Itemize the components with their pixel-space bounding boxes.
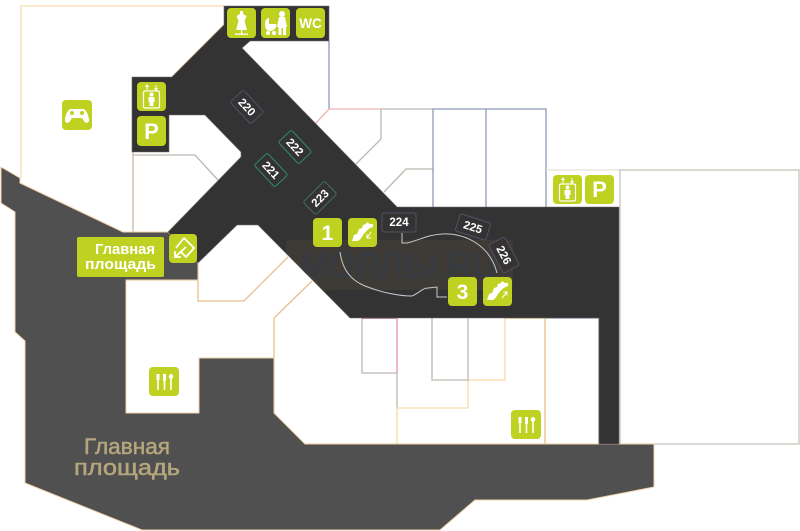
tag 221 — [254, 153, 288, 187]
icon: escalator down — [348, 218, 377, 247]
watermark: МОЛЛЫ.RU — [300, 245, 497, 287]
heading: main square: площадь — [74, 455, 180, 480]
icon: floor 1: 1 — [322, 222, 334, 245]
tag 225 — [455, 213, 491, 241]
tag 224: 224 — [389, 217, 409, 229]
main square floor area — [1, 167, 654, 530]
escalator route lines — [340, 233, 497, 297]
icon: floor 3: 3 — [457, 281, 468, 304]
icon: game zone — [62, 100, 92, 130]
icon: elevator right — [553, 175, 582, 204]
icon: parking right — [585, 175, 614, 204]
icon: parking left: P — [144, 119, 159, 144]
shop number tags — [230, 90, 519, 273]
callout: main square label: площадь — [85, 257, 156, 273]
tag 226 — [489, 237, 519, 273]
icon: floor 3 — [448, 277, 477, 306]
heading: main square — [74, 434, 180, 480]
heading: main square: Главная — [84, 434, 170, 459]
icon: floor 1 — [313, 218, 342, 247]
icon: elevator left — [137, 82, 166, 111]
tag 224 — [382, 213, 416, 232]
tag 223: 223 — [310, 188, 332, 210]
tag 220: 220 — [235, 97, 257, 119]
icon: direction to main square — [169, 234, 197, 263]
icon: fitting room mannequin — [227, 8, 256, 38]
icon: food court right — [511, 410, 541, 439]
tag 226: 226 — [493, 244, 513, 267]
icon: WC — [296, 8, 325, 38]
icon: parking left — [137, 116, 166, 146]
icon: escalator up — [483, 277, 512, 306]
callout: main square label — [77, 237, 164, 277]
callout: main square label: Главная — [95, 242, 155, 258]
icon: parking right: P — [592, 177, 607, 202]
tag 225: 225 — [462, 219, 484, 237]
tag 222 — [278, 130, 312, 164]
icon: food court left — [149, 367, 179, 396]
icon: mother and child room — [261, 8, 290, 38]
tag 221: 221 — [259, 160, 282, 182]
tag 223 — [303, 181, 337, 215]
tag 220 — [230, 90, 264, 124]
tag 222: 222 — [283, 137, 305, 159]
icon: WC: WC — [299, 16, 322, 31]
corridor floor area — [132, 6, 619, 444]
